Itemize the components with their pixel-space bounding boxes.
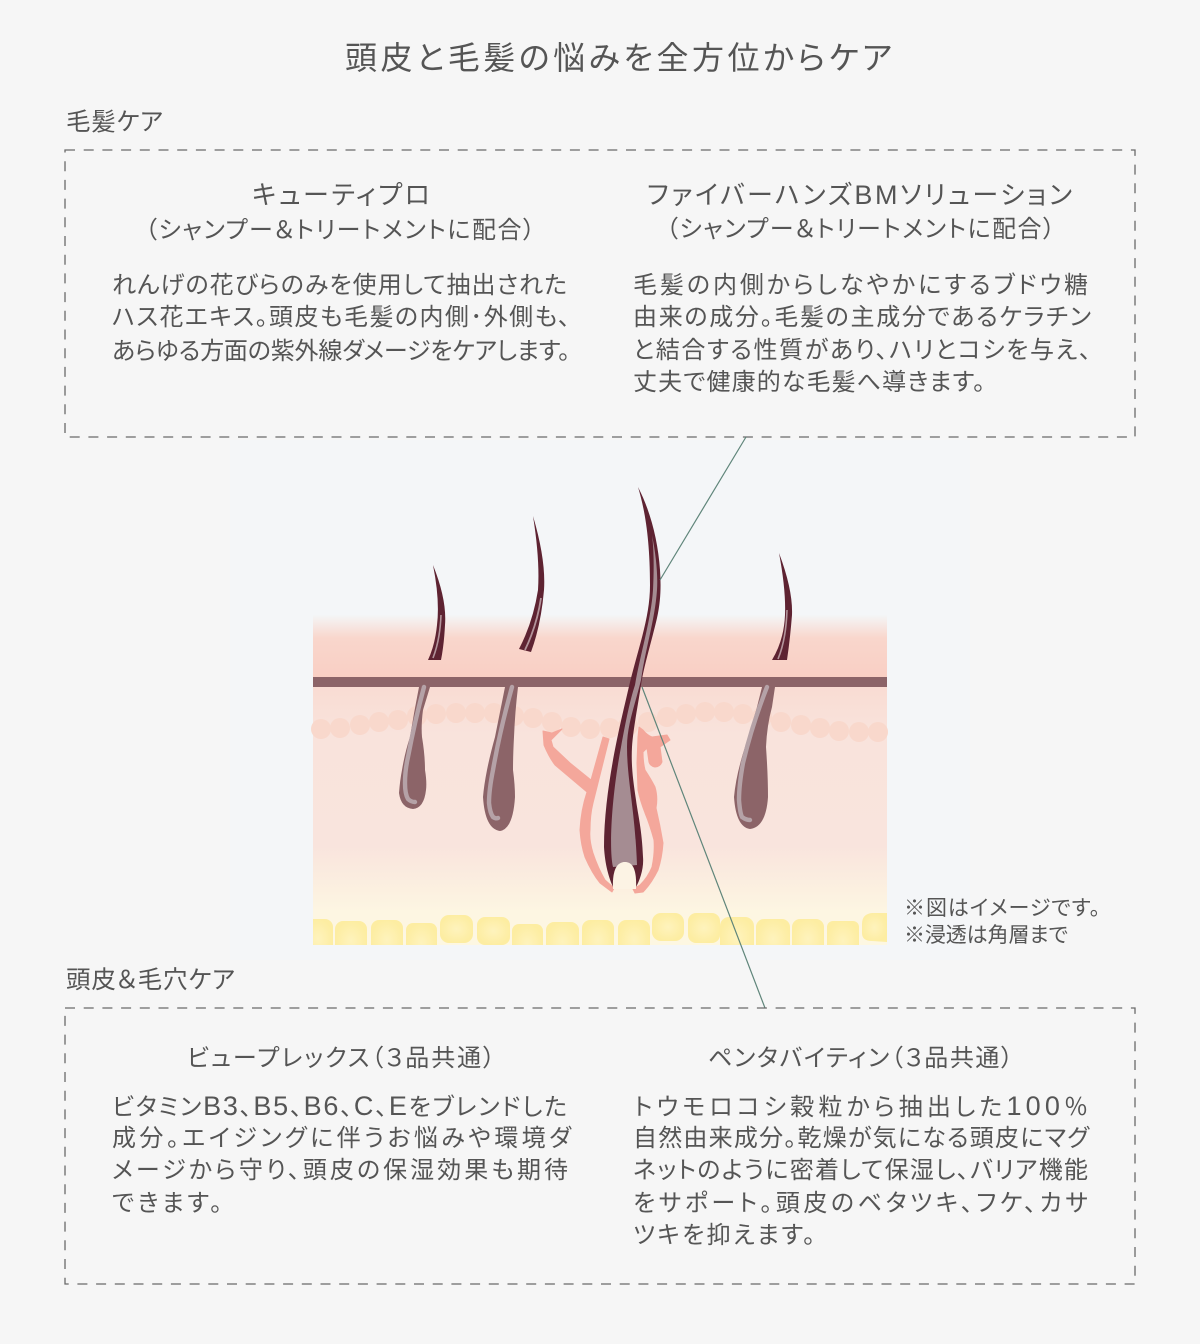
bulb notch (613, 862, 636, 889)
ingredient name: ペンタバイティン（３品共通） (708, 1045, 1013, 1072)
panel border (65, 150, 1135, 437)
description: ネットのように密着して保湿し、バリア機能 (633, 1157, 1088, 1184)
hair root (399, 687, 430, 809)
root highlight (405, 687, 424, 802)
image notes (904, 897, 1100, 947)
shaft highlight (525, 598, 541, 650)
description: 由来の成分。毛髪の主成分であるケラチン (633, 304, 1091, 331)
description: メージから守り、頭皮の保湿効果も期待 (112, 1157, 568, 1184)
follicle sheath (543, 727, 670, 893)
description (112, 1091, 572, 1217)
description: れんげの花びらのみを使用して抽出された (112, 272, 567, 299)
hair outer (604, 487, 661, 887)
description: 成分。エイジングに伴うお悩みや環境ダ (112, 1125, 572, 1152)
cell row: upper dots (311, 702, 888, 742)
title: 頭皮と毛髪の悩みを全方位からケア (345, 40, 892, 76)
heading: scalp and pore care: 頭皮＆毛穴ケア (66, 966, 235, 994)
description (633, 272, 1091, 396)
illustration background tint (230, 440, 970, 960)
description: 毛髪の内側からしなやかにするブドウ糖 (633, 272, 1088, 299)
description: ツキを抑えます。 (633, 1222, 815, 1249)
hair shaft (772, 553, 792, 660)
ingredient name: ファイバーハンズBMソリューション (647, 180, 1072, 210)
hair root (734, 687, 775, 829)
ingredient: Viewplex (112, 1045, 572, 1217)
ingredient name: キューティプロ (252, 180, 430, 210)
ingredient note: （シャンプー＆トリートメントに配合） (145, 217, 535, 244)
ingredient: Cutipro (112, 180, 570, 365)
description: ハス花エキス。頭皮も毛髪の内側･外側も、 (112, 304, 570, 331)
description: 自然由来成分。乾燥が気になる頭皮にマグ (633, 1125, 1090, 1152)
heading: hair care: 毛髪ケア (66, 108, 163, 136)
hair 4 (734, 553, 792, 829)
hair 2 (483, 516, 544, 831)
hair core (611, 535, 657, 867)
panel border (65, 1008, 1135, 1284)
description: トウモロコシ穀粒から抽出した100％ (634, 1091, 1088, 1121)
hair root (483, 687, 518, 831)
ingredient note: （シャンプー＆トリートメントに配合） (666, 216, 1055, 243)
leader line: to hair care panel (660, 437, 746, 580)
hair 3: main hair (604, 487, 661, 889)
description (633, 1091, 1090, 1249)
hair shaft (428, 565, 445, 660)
root highlight (739, 687, 767, 820)
ingredient name: ビュープレックス（３品共通） (187, 1045, 495, 1072)
panel: scalp and pore care (65, 1008, 1135, 1284)
leader line: to scalp care panel (642, 687, 765, 1008)
description: をサポート。頭皮のベタツキ、フケ、カサ (633, 1190, 1088, 1217)
skin surface band (313, 677, 887, 687)
shaft highlight (778, 610, 787, 659)
skin cross-section illustration (303, 487, 888, 964)
description: できます。 (112, 1190, 222, 1217)
description: あらゆる方面の紫外線ダメージをケアします。 (112, 338, 570, 365)
image notes: ※浸透は角層まで (904, 924, 1068, 947)
shaft highlight (433, 615, 441, 658)
description: ビタミンB3、B5、B6、C、Eをブレンドした (112, 1091, 567, 1121)
image notes: ※図はイメージです。 (904, 897, 1100, 920)
description (112, 272, 570, 365)
panel: hair care (65, 150, 1135, 437)
ingredient: Fiber Hands BM Solution (633, 180, 1091, 396)
description: 丈夫で健康的な毛髪へ導きます。 (633, 369, 985, 396)
hair shaft (519, 516, 544, 652)
skin layers (313, 615, 887, 945)
root highlight (489, 687, 512, 818)
cell row: yellow fat cells (313, 913, 887, 945)
ingredient: Pentabiotin (633, 1045, 1090, 1249)
hair 1 (399, 565, 445, 809)
description: と結合する性質があり、ハリとコシを与え、 (633, 337, 1091, 364)
